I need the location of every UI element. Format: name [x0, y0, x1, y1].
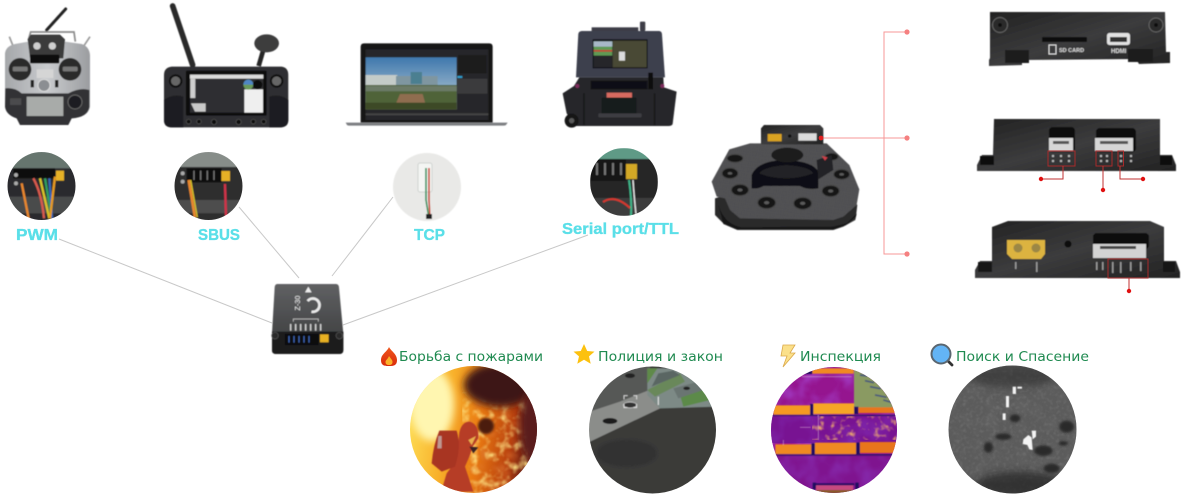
heading: police and law: Полиция и закон: [598, 349, 723, 365]
label: Serial port/TTL: Serial port/TTL: [562, 221, 679, 238]
label: SBUS: SBUS: [198, 227, 240, 244]
panel: SD card and HDMI side of device: SD CARD: [1059, 48, 1084, 54]
panel: power side of device: [975, 221, 1180, 278]
panel: SD card and HDMI side of device: HDMI: [1111, 49, 1127, 55]
icon: flame: [381, 347, 397, 366]
icon: lightning bolt: [781, 345, 795, 367]
heading: search and rescue: Поиск и Спасение: [956, 349, 1089, 365]
callout: power side pin group: [1108, 259, 1148, 293]
connection lines to central controller: [59, 197, 588, 325]
icon: TCP connector photo: [393, 153, 461, 221]
icon: Z-30 central controller: [272, 284, 343, 354]
photo: thermal solar panel inspection: [770, 366, 900, 494]
icon: PWM connector photo: [7, 152, 77, 222]
icon: magnifying glass: [932, 344, 952, 365]
callout bracket connecting gimbal to port views: [819, 29, 910, 257]
heading: inspection: Инспекция: [800, 349, 881, 365]
icon: suitcase ground station: [563, 22, 677, 128]
icon: RC transmitter: [5, 9, 90, 125]
icon: laptop: [346, 43, 508, 126]
photo: thermal search and rescue: [946, 363, 1080, 498]
heading: firefighting: Борьба с пожарами: [399, 349, 543, 365]
icon: ground control handset: [164, 6, 288, 127]
label: TCP: TCP: [414, 227, 445, 244]
panel: SD card and HDMI side of device: [989, 12, 1170, 66]
label: PWM: PWM: [16, 227, 58, 244]
icon: SBUS connector photo: [173, 152, 243, 222]
icon: star: [574, 344, 594, 364]
callouts: connector pin groups: [1039, 151, 1145, 192]
icon: Z-30 central controller: Z-30: [293, 296, 302, 311]
photo: police surveillance aerial: [587, 365, 718, 495]
photo: firefighter in flames: [410, 366, 537, 493]
icon: gimbal mount with carbon plate: [712, 125, 859, 230]
icon: serial port connector photo: [590, 148, 658, 216]
panel: connector side of device: [977, 119, 1176, 171]
